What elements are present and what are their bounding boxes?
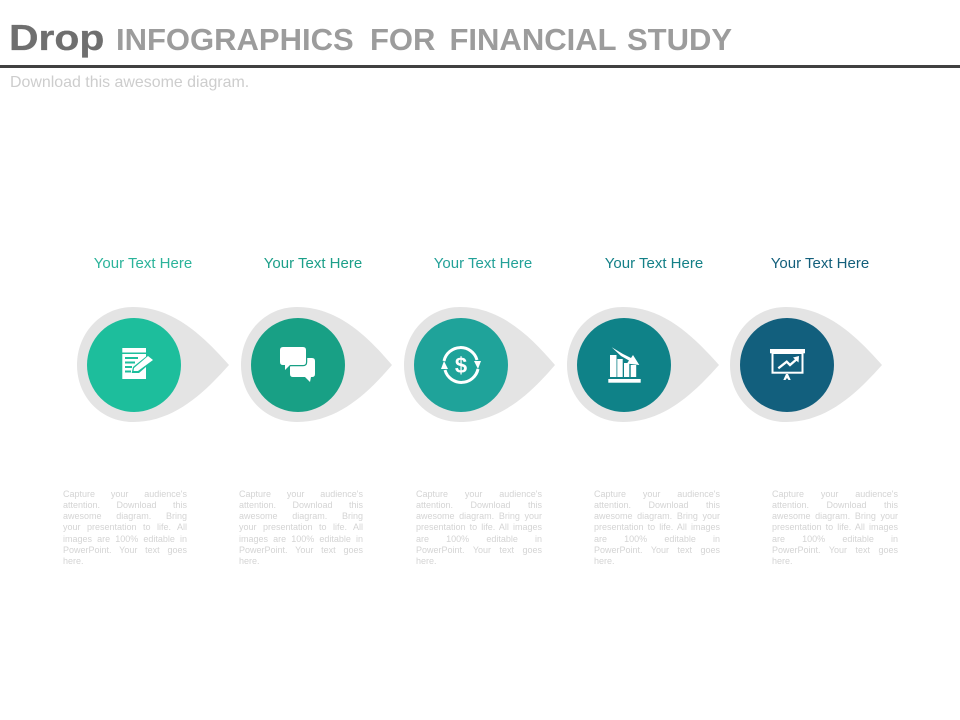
title: STUDY	[627, 22, 732, 57]
body text: step 5: Capture your audience's	[772, 488, 898, 498]
body text: step 4: are 100% editable in	[594, 534, 720, 544]
body text: step 3: attention. Download this	[416, 500, 542, 510]
body text: step 5: presentation to life. All images	[772, 522, 898, 532]
body text: step 2: your presentation to life. All	[239, 522, 363, 532]
panel: step 5 presentation	[730, 255, 898, 566]
heading: step 5: Your Text Here	[771, 255, 869, 272]
subtitle: Download this awesome diagram.	[10, 74, 249, 91]
panel: step 4 bars	[567, 255, 720, 566]
body text: step 5	[772, 488, 898, 566]
body text: step 3	[416, 488, 542, 566]
heading: step 3: Your Text Here	[434, 255, 532, 272]
drop with dollar icon	[404, 307, 555, 422]
drop with presentation icon	[730, 307, 882, 422]
body text: step 1: attention. Download this	[63, 500, 187, 510]
heading: step 1: Your Text Here	[94, 255, 192, 272]
body text: step 2: PowerPoint. Your text goes	[239, 545, 363, 555]
drop with note icon	[77, 307, 229, 422]
icon: dollar with cycle arrows: $	[455, 353, 467, 378]
body text: step 1	[63, 488, 187, 566]
body text: step 3: awesome diagram. Bring your	[416, 511, 542, 521]
body text: step 1: awesome diagram. Bring	[63, 511, 187, 521]
body text: step 4: Capture your audience's	[594, 488, 720, 498]
panel: step 1 notes	[63, 255, 229, 566]
body text: step 2: awesome diagram. Bring	[239, 511, 363, 521]
body text: step 1: PowerPoint. Your text goes	[63, 545, 187, 555]
body text: step 4: presentation to life. All images	[594, 522, 720, 532]
heading: step 4: Your Text Here	[605, 255, 703, 272]
title: INFOGRAPHICS	[116, 22, 354, 57]
header rule	[0, 65, 960, 68]
body text: step 3: presentation to life. All images	[416, 522, 542, 532]
title	[9, 17, 732, 58]
title: FINANCIAL	[450, 22, 617, 57]
body text: step 1: here.	[63, 556, 84, 566]
panel: step 3 dollar	[404, 255, 555, 566]
heading: step 2: Your Text Here	[264, 255, 362, 272]
body text: step 3: PowerPoint. Your text goes	[416, 545, 542, 555]
title: FOR	[370, 22, 435, 57]
drop with chat icon	[241, 307, 392, 422]
body text: step 1: your presentation to life. All	[63, 522, 187, 532]
body text: step 3: Capture your audience's	[416, 488, 542, 498]
body text: step 1: Capture your audience's	[63, 488, 187, 498]
body text: step 2: images are 100% editable in	[239, 534, 363, 544]
body text: step 5: PowerPoint. Your text goes	[772, 545, 898, 555]
body text: step 4: attention. Download this	[594, 500, 720, 510]
icon: speech bubbles	[280, 347, 315, 382]
body text: step 3: here.	[416, 556, 437, 566]
icon: note and pencil	[122, 348, 154, 379]
body text: step 4	[594, 488, 720, 566]
body text: step 5: here.	[772, 556, 793, 566]
body text: step 4: PowerPoint. Your text goes	[594, 545, 720, 555]
body text: step 5: awesome diagram. Bring your	[772, 511, 898, 521]
body text: step 5: are 100% editable in	[772, 534, 898, 544]
drop with bar chart icon	[567, 307, 719, 422]
body text: step 1: images are 100% editable in	[63, 534, 187, 544]
panel: step 2 chat	[239, 255, 392, 566]
body text: step 5: attention. Download this	[772, 500, 898, 510]
body text: step 2: attention. Download this	[239, 500, 363, 510]
body text: step 2: here.	[239, 556, 260, 566]
body text: step 4: awesome diagram. Bring your	[594, 511, 720, 521]
body text: step 2: Capture your audience's	[239, 488, 363, 498]
icon: presentation board	[770, 349, 805, 380]
title: Drop	[9, 17, 104, 58]
body text: step 2	[239, 488, 363, 566]
icon: dollar with cycle arrows	[441, 348, 481, 382]
icon: falling bar chart	[608, 347, 641, 383]
body text: step 3: are 100% editable in	[416, 534, 542, 544]
body text: step 4: here.	[594, 556, 615, 566]
